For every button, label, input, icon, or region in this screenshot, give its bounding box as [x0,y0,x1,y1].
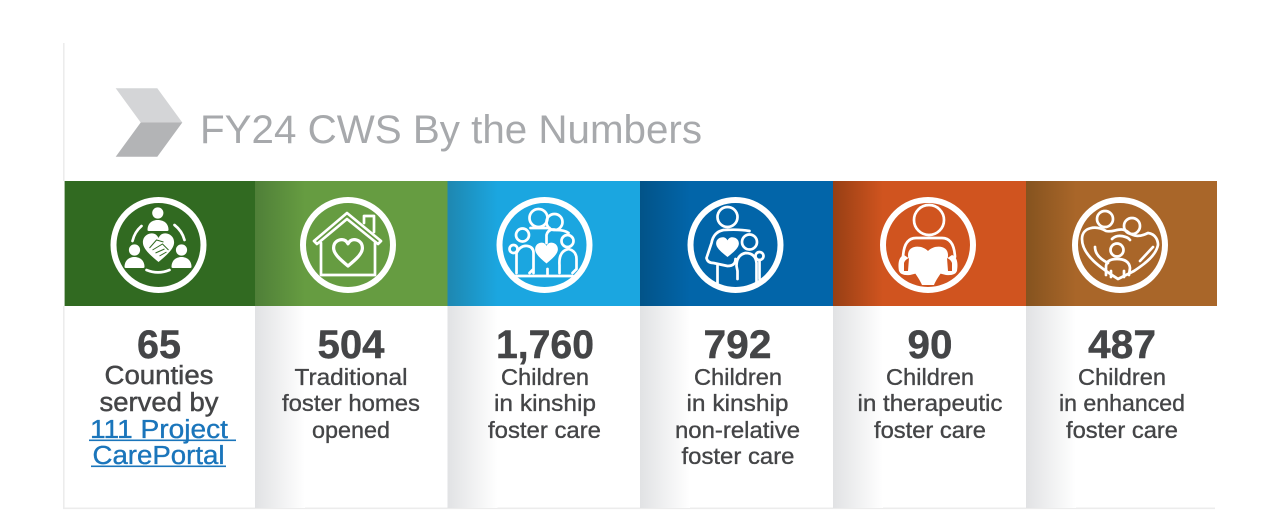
stat: 1,760: foster care [488,417,601,443]
stat: 90: foster care [874,417,986,443]
stat: 90: in therapeutic [858,390,1003,416]
icon: family in heart shape [1075,200,1165,290]
panel: kinship non-relative foster care [640,181,833,508]
stat: 792: 792 [704,323,772,367]
link: 111 Project CarePortal: CarePortal [92,442,224,470]
stat: 1,760: Children [501,364,589,390]
stat: 792: in kinship [686,390,788,416]
stat: 65 counties [100,323,219,417]
stat: 504: foster homes [282,390,420,416]
stat: 792: Children [694,364,782,390]
stat: 90: 90 [908,323,952,367]
icon: adult holding heart with child [690,200,780,290]
stat: 487 [1059,323,1185,443]
icon: person hugging heart [883,200,973,290]
link: 111 Project CarePortal [89,416,236,470]
stat: 90 [858,323,1003,443]
icon: family with heart [500,200,590,290]
panel: traditional foster homes [255,181,448,508]
stat: 792 [675,323,800,469]
stat: 487: foster care [1066,417,1178,443]
stat: 1,760: 1,760 [496,323,594,367]
icon: chevron [116,88,182,157]
stat: 504 [282,323,420,443]
panel: enhanced foster care [1026,181,1217,508]
title: FY24 CWS By the Numbers [200,108,702,152]
stat: 504: Traditional [294,364,408,390]
stat: 65 counties: served by [100,389,219,417]
stat: 487: Children [1078,364,1166,390]
panel: therapeutic foster care [833,181,1026,508]
stat: 487: in enhanced [1059,390,1185,416]
link: 111 Project CarePortal: 111 Project [90,416,228,444]
stat: 1,760: in kinship [494,390,596,416]
stat: 1,760 [488,323,601,443]
stat: 65 counties: Counties [104,362,214,390]
icon: house with heart [303,200,393,290]
stat: 504: 504 [318,323,385,367]
stat: 792: non-relative [675,417,800,443]
panel: counties served [65,181,255,470]
stat: 487: 487 [1088,323,1156,367]
stat: 90: Children [886,364,974,390]
panel: kinship foster care [448,181,640,508]
stat: 792: foster care [682,443,794,469]
icon: people around a handshake heart [114,200,204,290]
stat: 65 counties: 65 [137,323,181,367]
stat: 504: opened [312,417,390,443]
